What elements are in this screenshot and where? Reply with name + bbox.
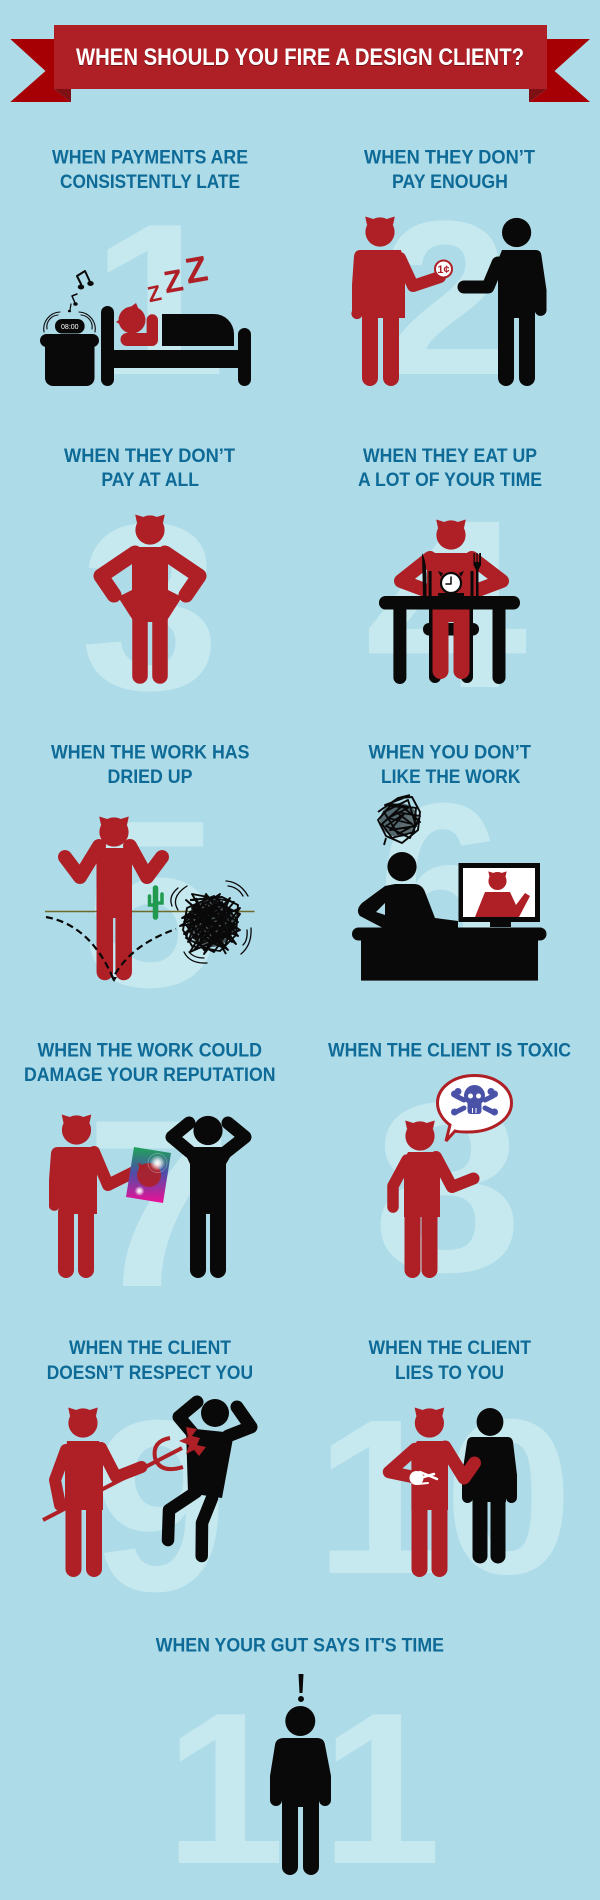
panel 10: lies to you (315, 1337, 573, 1620)
icon: bedside table and alarm clock (40, 312, 99, 386)
exclamation mark (298, 1674, 304, 1702)
desert horizon line (45, 910, 254, 912)
panel 4: eat up time (358, 445, 542, 738)
figure: worker at desk (358, 852, 458, 928)
heading 7: DAMAGE YOUR REPUTATION (24, 1064, 276, 1086)
numeral 6: 6 (378, 752, 502, 1025)
heading 10: WHEN THE CLIENT (368, 1337, 531, 1359)
icon: sleep z letters: Z (161, 262, 186, 300)
icon: sleep z letters: Z (145, 280, 164, 307)
figure: client reaching (464, 218, 546, 378)
figure: client in despair (172, 1116, 245, 1270)
heading 1: CONSISTENTLY LATE (60, 171, 240, 193)
heading 7: WHEN THE WORK COULD (38, 1040, 262, 1062)
panel 6: don't like the work (352, 742, 546, 1025)
icon: one cent coin (435, 260, 452, 278)
banner left tail (10, 39, 71, 102)
icon: bedside table and alarm clock: 08:00 (61, 324, 79, 331)
heading 9: WHEN THE CLIENT (69, 1337, 231, 1359)
icon: sleeping devil (116, 303, 158, 346)
heading 3: WHEN THEY DON’T (64, 445, 235, 467)
heading 3: PAY AT ALL (101, 469, 199, 491)
figure: devil crossing fingers (389, 1408, 474, 1569)
icon: music notes (68, 271, 94, 312)
icon: crossed fingers hand (410, 1471, 437, 1485)
heading 1: WHEN PAYMENTS ARE (52, 147, 248, 169)
icon: cactus (150, 888, 162, 917)
tumbleweed motion arcs (171, 881, 251, 963)
icon: red spark (179, 1427, 206, 1456)
figure: devil talking (393, 1120, 474, 1270)
figure: devil at table (401, 520, 502, 671)
heading 5: DRIED UP (108, 766, 192, 788)
figure: devil offering coin (351, 216, 452, 378)
numeral 1: 1 (91, 178, 226, 420)
panel 2: don't pay enough (351, 147, 546, 421)
numeral 5: 5 (82, 772, 220, 1037)
figure: devil with pitchfork (43, 1408, 183, 1569)
panel 3: don't pay at all (64, 445, 235, 740)
icon: skull and crossbones (451, 1085, 498, 1116)
figure: client being poked (168, 1399, 251, 1556)
icon: table (379, 596, 520, 678)
icon: bed (101, 306, 251, 386)
panel 11: gut says it's time (156, 1635, 444, 1900)
heading 11: WHEN YOUR GUT SAYS IT'S TIME (156, 1635, 444, 1657)
heading 6: LIKE THE WORK (381, 766, 520, 788)
heading 10: LIES TO YOU (395, 1362, 504, 1384)
numeral 9: 9 (92, 1369, 228, 1642)
banner right tail (529, 39, 590, 102)
panel 8: client is toxic (328, 1040, 571, 1323)
figure: devil with empty pockets (101, 514, 199, 676)
numeral 7: 7 (85, 1070, 233, 1337)
icon: alarm clock (438, 571, 464, 597)
icon: monitor with devil (458, 863, 540, 927)
heading 5: WHEN THE WORK HAS (51, 742, 250, 764)
dashed bounce path (46, 917, 176, 978)
panel 9: doesn't respect you (43, 1337, 253, 1642)
icon: chair (423, 571, 479, 683)
icon: knife and fork (422, 553, 481, 597)
numeral 3: 3 (80, 475, 220, 740)
heading 4: A LOT OF YOUR TIME (358, 469, 542, 491)
panel 5: work dried up (45, 742, 254, 1037)
icon: pitchfork (43, 1438, 183, 1520)
heading 4: WHEN THEY EAT UP (363, 445, 537, 467)
figure: client behind (462, 1408, 517, 1556)
numeral 8: 8 (372, 1053, 522, 1323)
numeral 2: 2 (380, 175, 510, 421)
heading 2: PAY ENOUGH (392, 171, 508, 193)
callout: speech bubble with skull (438, 1076, 512, 1141)
icon: angry scribble (378, 795, 420, 845)
heading 2: WHEN THEY DON’T (364, 147, 535, 169)
heading 9: DOESN’T RESPECT YOU (47, 1362, 253, 1384)
panel 1: payments late (40, 147, 251, 420)
heading 6: WHEN YOU DON’T (368, 742, 531, 764)
icon: sleep z letters (145, 247, 211, 307)
figure: devil handing design (49, 1114, 134, 1270)
numeral 10: 10 (315, 1373, 573, 1620)
title text: WHEN SHOULD YOU FIRE A DESIGN CLIENT? (76, 44, 524, 71)
icon: sleep z letters: Z (182, 247, 211, 292)
panel 7: damage reputation (24, 1040, 276, 1337)
heading 8: WHEN THE CLIENT IS TOXIC (328, 1040, 571, 1062)
icon: garish design card (126, 1147, 171, 1203)
icon: one cent coin: 1¢ (437, 264, 450, 276)
icon: tumbleweed (171, 881, 251, 963)
icon: desk (352, 928, 546, 981)
figure: devil shrugging (65, 816, 162, 972)
figure: person with gut feeling (270, 1706, 331, 1867)
title banner (10, 25, 590, 102)
numeral 4: 4 (364, 470, 528, 738)
